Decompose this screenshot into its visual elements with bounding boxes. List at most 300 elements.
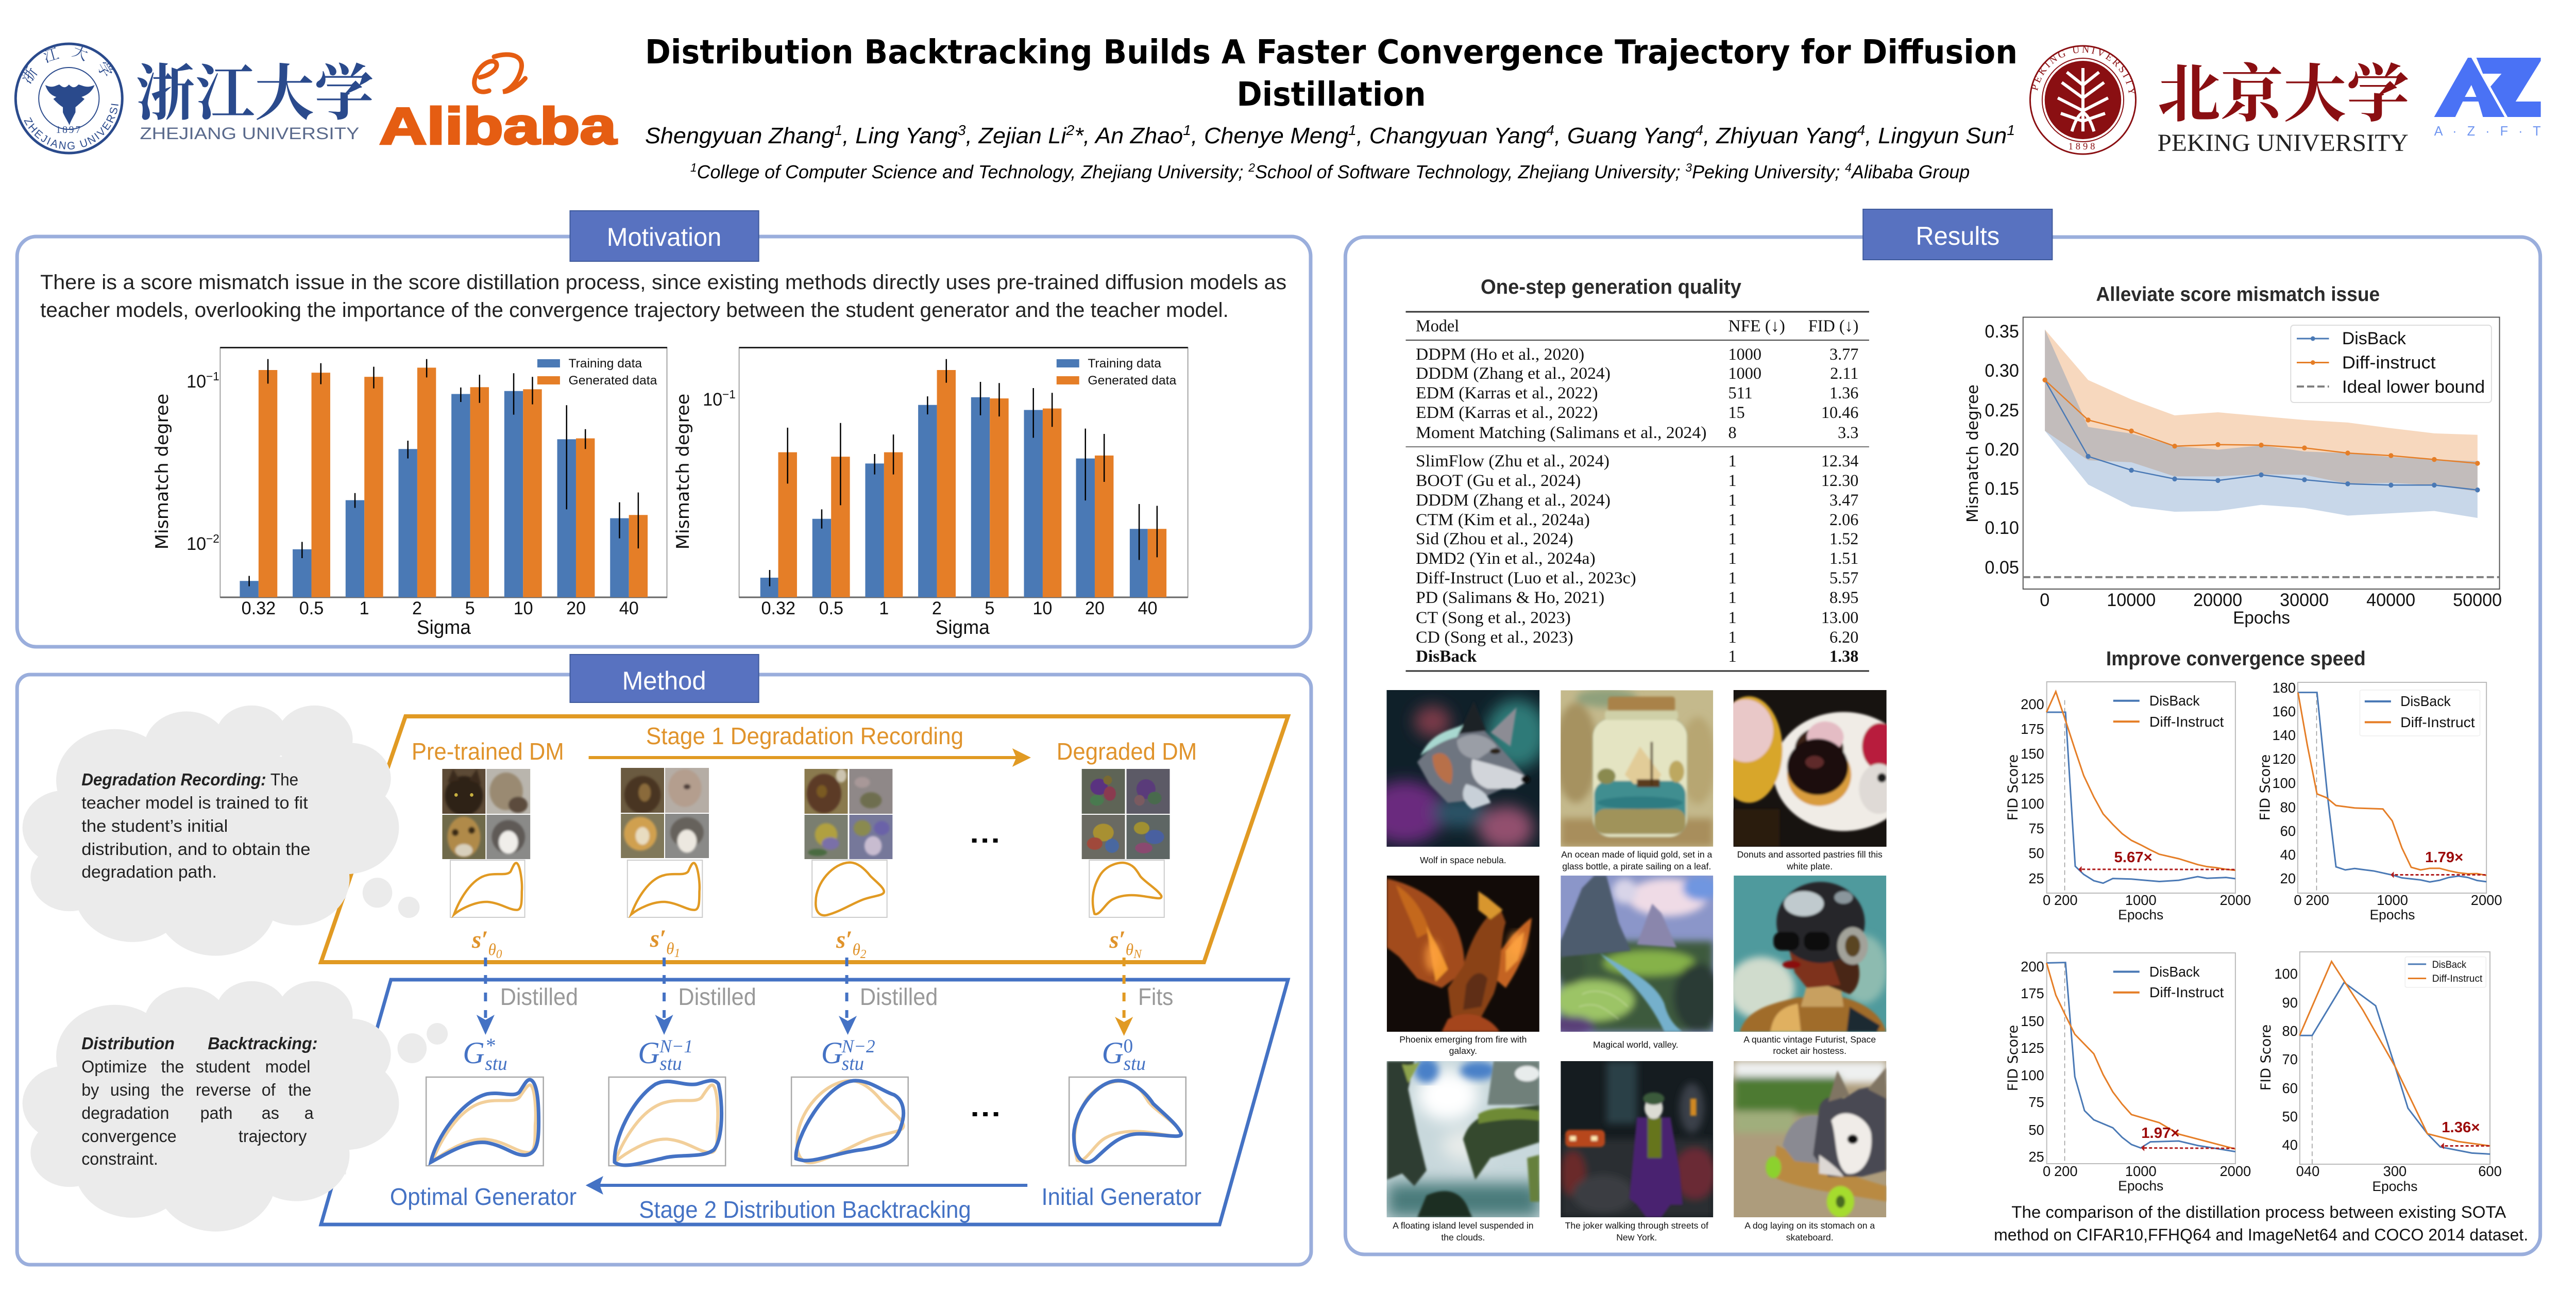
authors: 1 xyxy=(2007,122,2015,138)
y axis ticks: 10 xyxy=(187,372,206,392)
line chart: convergence B: 60 xyxy=(2280,823,2296,839)
line chart: convergence B: 160 xyxy=(2272,703,2296,719)
table rows: PD (Salimans & Ho, 2021) xyxy=(1416,589,1604,607)
table rows: 511 xyxy=(1728,384,1753,402)
line chart: convergence A: 2000 xyxy=(2219,892,2251,908)
table rows: 12.30 xyxy=(1821,472,1858,490)
table rows: Moment Matching (Salimans et al., 2024) xyxy=(1416,424,1707,442)
line chart: convergence A: 200 xyxy=(2021,696,2044,712)
generator labels: stu xyxy=(842,1053,864,1075)
line chart: convergence C: 75 xyxy=(2028,1094,2044,1110)
table rows: 2.06 xyxy=(1829,511,1858,529)
caption: white plate. xyxy=(1786,861,1833,871)
caption: galaxy. xyxy=(1449,1046,1477,1056)
speedup label: 1.36× xyxy=(2442,1119,2480,1136)
line chart: convergence B xyxy=(2258,680,2502,922)
cloud: distribution backtracking xyxy=(23,981,448,1232)
line chart: convergence D: 100 xyxy=(2274,966,2298,982)
x axis ticks: 0.32 xyxy=(242,599,276,618)
table header: FID (↓) xyxy=(1808,317,1858,335)
y axis ticks: 0.25 xyxy=(1985,401,2019,421)
line chart: convergence D: 90 xyxy=(2282,995,2298,1011)
table rows: 15 xyxy=(1728,404,1745,422)
x axis ticks: 0.5 xyxy=(299,599,324,618)
authors: , Changyuan Yang xyxy=(1357,124,1546,148)
curve box: step 2 xyxy=(812,860,887,917)
table rows: 6.20 xyxy=(1829,628,1858,647)
line chart: convergence B: FID Score xyxy=(2258,754,2273,820)
table rows: 1 xyxy=(1728,511,1737,529)
table rows: 1000 xyxy=(1728,345,1761,364)
y axis ticks: 10 xyxy=(187,534,206,554)
Zhejiang University English name: ZHEJIANG UNIVERSITY xyxy=(140,124,359,143)
Peking University Chinese name: 北京大学 xyxy=(2158,44,2410,134)
table rows: CT (Song et al., 2023) xyxy=(1416,609,1571,627)
caption: New York. xyxy=(1616,1232,1657,1243)
table rows: 1 xyxy=(1728,491,1737,510)
affiliations: Peking University; xyxy=(1692,162,1845,182)
caption: A quantic vintage Futurist, Space xyxy=(1743,1034,1876,1045)
results caption: method on CIFAR10,FFHQ64 and ImageNet64 and COCO 2014 dataset. xyxy=(1994,1226,2528,1244)
legend xyxy=(1057,357,1177,388)
image: jar xyxy=(1561,690,1714,847)
score labels: θ xyxy=(666,939,680,960)
line chart: convergence D: 70 xyxy=(2282,1051,2298,1067)
line chart: convergence A: 50 xyxy=(2028,845,2044,861)
x axis ticks: 0 xyxy=(2040,591,2049,610)
table rows: DisBack xyxy=(1416,647,1477,666)
line chart: convergence D xyxy=(2259,952,2502,1194)
image: wolf xyxy=(1386,690,1539,847)
logo: AZFT xyxy=(2434,58,2541,139)
caption: the clouds. xyxy=(1441,1232,1485,1243)
x axis ticks: 40 xyxy=(1138,599,1158,618)
icon: Alibaba swirl xyxy=(474,55,526,92)
y axis ticks: 0.35 xyxy=(1985,322,2019,342)
cloud text: Backtracking: xyxy=(208,1034,317,1053)
image gallery xyxy=(1365,689,1914,1243)
authors: , Zejian Li xyxy=(966,124,1067,148)
affiliations: 1 xyxy=(690,161,697,174)
table rows: 1.38 xyxy=(1829,647,1858,666)
y axis ticks xyxy=(1985,322,2019,578)
arrow labels xyxy=(500,984,1173,1010)
authors: 2 xyxy=(1065,122,1074,138)
caption: Donuts and assorted pastries fill this xyxy=(1737,849,1883,860)
table rows: 3.3 xyxy=(1838,424,1858,442)
ellipsis: stage 2 xyxy=(973,1112,998,1116)
line chart: convergence B: Epochs xyxy=(2370,907,2415,922)
line chart: convergence A: Diff-Instruct xyxy=(2149,714,2224,730)
y axis tick: −1 xyxy=(722,388,736,401)
arrow: distilled 2 xyxy=(655,958,673,1035)
authors: Shengyuan Zhang xyxy=(645,124,826,148)
table rows: 1.51 xyxy=(1829,549,1858,568)
legend: DisBack xyxy=(2342,329,2406,348)
line chart: convergence B: 40 xyxy=(2280,847,2296,863)
line chart: convergence D: FID Score xyxy=(2259,1025,2274,1090)
heading: Motivation: Motivation xyxy=(607,223,721,251)
line chart: convergence B: 0 xyxy=(2294,892,2302,908)
line chart: convergence C: 100 xyxy=(2021,1067,2044,1083)
legend xyxy=(537,357,657,388)
line chart: convergence A: 200 xyxy=(2054,892,2078,908)
score labels: s′ xyxy=(836,927,852,953)
x axis ticks: 10 xyxy=(1032,599,1052,618)
table rows: 8 xyxy=(1728,424,1737,442)
caption: Phoenix emerging from fire with xyxy=(1399,1034,1527,1045)
line chart: convergence C: Diff-Instruct xyxy=(2149,984,2224,1000)
icon: AZ mark xyxy=(2434,58,2541,117)
cloud text xyxy=(81,1034,317,1168)
cloud text: the xyxy=(161,1080,184,1099)
caption xyxy=(1561,849,1712,871)
caption: rocket air hostess. xyxy=(1773,1046,1846,1056)
line: Diff-instruct xyxy=(2042,378,2480,466)
image: joker xyxy=(1561,1061,1716,1217)
table rows: SlimFlow (Zhu et al., 2024) xyxy=(1416,452,1609,471)
line chart: convergence B: 80 xyxy=(2280,799,2296,815)
line chart: convergence A: 75 xyxy=(2028,820,2044,836)
image grid: degrading samples 2 xyxy=(805,769,892,859)
arrow: stage 2 xyxy=(586,1176,1027,1195)
curve box: degraded xyxy=(1089,860,1164,917)
score labels: s′ xyxy=(650,926,666,952)
x axis ticks: 20 xyxy=(1085,599,1105,618)
table rows: 8.95 xyxy=(1829,589,1858,607)
curve box: generator N-1 xyxy=(609,1077,725,1166)
curve box: step 1 xyxy=(628,860,702,917)
image: futurist xyxy=(1727,876,1888,1032)
line chart: convergence C: 200 xyxy=(2054,1163,2078,1179)
table rows: 1000 xyxy=(1728,364,1761,383)
legend: Generated data xyxy=(569,374,657,388)
score labels: θ xyxy=(488,941,502,961)
table rows: DDPM (Ho et al., 2020) xyxy=(1416,345,1584,364)
line chart: convergence C: 1000 xyxy=(2125,1163,2157,1179)
legend xyxy=(2291,325,2492,402)
line chart: convergence D: 300 xyxy=(2383,1163,2406,1179)
line chart: convergence A: 125 xyxy=(2021,770,2044,786)
x axis ticks: 40 xyxy=(619,599,639,618)
score labels: s′ xyxy=(1109,927,1126,953)
line chart: convergence B: 200 xyxy=(2306,892,2329,908)
x axis ticks: 2 xyxy=(932,599,942,618)
heading: Method xyxy=(570,655,759,702)
bar chart: mismatch degree left xyxy=(152,347,667,638)
line chart: convergence B: 1000 xyxy=(2377,892,2408,908)
image: valley xyxy=(1552,876,1722,1035)
score labels: N xyxy=(1133,948,1142,961)
y axis ticks: −2 xyxy=(206,532,219,545)
line chart: convergence D: 60 xyxy=(2282,1080,2298,1096)
y axis ticks: 0.10 xyxy=(1985,518,2019,538)
x axis ticks: 20000 xyxy=(2193,591,2242,610)
results caption: The comparison of the distillation process between existing SOTA xyxy=(2011,1203,2506,1221)
x axis ticks: 40000 xyxy=(2366,591,2415,610)
table header: Model xyxy=(1416,317,1459,335)
image: floating island xyxy=(1387,1058,1539,1217)
ellipsis: stage 1 xyxy=(972,838,998,843)
authors: *, An Zhao xyxy=(1074,124,1183,148)
line chart: convergence C: 125 xyxy=(2021,1040,2044,1056)
panel: results xyxy=(1345,209,2540,1254)
icon: Peking University seal: 1898 xyxy=(2069,141,2097,152)
line chart: convergence D: Diff-Instruct xyxy=(2432,973,2483,984)
cloud text: as xyxy=(262,1103,279,1122)
line chart: convergence A: 0 xyxy=(2043,892,2050,908)
legend: Generated data xyxy=(1088,374,1177,388)
authors: , Zhiyuan Yang xyxy=(1703,124,1857,148)
logo: Alibaba xyxy=(379,55,617,155)
motivation text: There is a score mismatch issue in the score distillation process, since existing methods directly uses pre-trained diffusion models as xyxy=(40,271,1286,294)
line chart: convergence C xyxy=(2005,953,2251,1194)
band: Diff-instruct xyxy=(2045,329,2478,492)
table heading: One-step generation quality xyxy=(1481,276,1741,298)
heading: Results xyxy=(1863,209,2052,260)
line chart: convergence A: 175 xyxy=(2021,721,2044,737)
icon: Zhejiang University seal: 1897 xyxy=(56,124,82,136)
axis title: Mismatch degree: Mismatch degree xyxy=(673,394,693,549)
x axis ticks: 5 xyxy=(465,599,475,618)
table rows: EDM (Karras et al., 2022) xyxy=(1416,404,1598,422)
table rows: 1 xyxy=(1728,452,1737,471)
speedup label: 1.79× xyxy=(2425,849,2463,866)
cloud text: the xyxy=(161,1057,184,1076)
y axis ticks: 0.30 xyxy=(1985,361,2019,381)
line chart: mismatch over epochs xyxy=(1964,317,2502,628)
axis title: Mismatch degree: Mismatch degree xyxy=(1964,384,1982,523)
heading: Alleviate score mismatch issue: Alleviate score mismatch issue xyxy=(2096,283,2380,306)
generator labels: stu xyxy=(485,1053,507,1075)
curve box: initial generator xyxy=(1069,1077,1186,1166)
table rows: Diff-Instruct (Luo et al., 2023c) xyxy=(1416,569,1636,588)
authors: 4 xyxy=(1857,122,1865,138)
speedup label: 5.67× xyxy=(2114,849,2153,866)
image grid: pre-trained samples xyxy=(442,769,530,859)
table rows: DDDM (Zhang et al., 2024) xyxy=(1416,364,1611,383)
generator labels: stu xyxy=(659,1053,682,1075)
line chart: convergence A: DisBack xyxy=(2149,693,2200,709)
heading: Results: Results xyxy=(1916,222,1999,250)
logo: Peking University xyxy=(2029,44,2410,157)
authors: 4 xyxy=(1695,122,1703,138)
score labels xyxy=(471,926,1142,961)
table rows: 1 xyxy=(1728,589,1737,607)
score labels: θ xyxy=(1126,941,1142,961)
x axis ticks: 50000 xyxy=(2453,591,2502,610)
line chart: convergence C: 25 xyxy=(2028,1149,2044,1165)
cloud text: path xyxy=(200,1103,232,1122)
table rows xyxy=(1416,345,1858,666)
axis title: Sigma: Sigma xyxy=(936,616,990,638)
table rows: Sid (Zhou et al., 2024) xyxy=(1416,530,1573,548)
generator labels: N−2 xyxy=(841,1036,875,1056)
line chart: convergence C: DisBack xyxy=(2149,964,2200,980)
generator labels: * xyxy=(485,1034,495,1057)
table rows: 1 xyxy=(1728,647,1737,666)
Zhejiang University Chinese name: 浙江大学 xyxy=(136,45,374,132)
generator labels: N−1 xyxy=(659,1036,693,1056)
affiliations: College of Computer Science and Technology, Zhejiang University; xyxy=(697,162,1248,182)
motivation text: teacher models, overlooking the importance of the convergence trajectory between the student generator and the teacher model. xyxy=(40,299,1229,322)
line: DisBack xyxy=(2045,380,2480,493)
table rows: 1 xyxy=(1728,549,1737,568)
legend: Ideal lower bound xyxy=(2342,378,2485,397)
cloud text: a xyxy=(304,1103,314,1122)
title: Distribution Backtracking Builds A Faster Convergence Trajectory for Diffusion xyxy=(645,32,2018,71)
authors: , Guang Yang xyxy=(1554,124,1695,148)
line chart: convergence D: 040 xyxy=(2296,1163,2319,1179)
image: dog on skateboard xyxy=(1734,1061,1886,1217)
line chart: convergence A: 25 xyxy=(2028,870,2044,886)
cloud text: by xyxy=(81,1080,99,1099)
cloud text: model xyxy=(265,1057,310,1076)
image grid: degraded samples xyxy=(1082,769,1170,859)
generator labels: stu xyxy=(1124,1053,1146,1075)
stage 1 labels: Degraded DM xyxy=(1057,739,1197,765)
title: Distillation xyxy=(1236,75,1426,113)
x axis ticks: 1 xyxy=(879,599,889,618)
legend: Diff-instruct xyxy=(2342,354,2436,373)
arrow labels: Distilled xyxy=(500,984,578,1010)
generator labels: G xyxy=(1102,1035,1124,1070)
table rows: 1 xyxy=(1728,472,1737,490)
title xyxy=(645,32,2018,113)
x axis ticks: 2 xyxy=(412,599,422,618)
caption: Magical world, valley. xyxy=(1593,1039,1679,1050)
cloud text: Degradation Recording: The xyxy=(81,770,298,789)
line chart: convergence A: 100 xyxy=(2021,796,2044,812)
line chart: convergence B: 120 xyxy=(2272,751,2296,767)
distribution boxes: stage 1 curves xyxy=(450,860,1164,917)
line chart: convergence D: 600 xyxy=(2478,1163,2502,1179)
Alibaba wordmark: Alibaba xyxy=(379,97,617,155)
heading: Method: Method xyxy=(622,666,706,695)
logo: Zhejiang University xyxy=(14,42,374,155)
line chart: convergence B: 180 xyxy=(2272,680,2296,696)
caption xyxy=(1743,1034,1876,1056)
results caption xyxy=(1994,1203,2528,1244)
legend: Training data xyxy=(1088,357,1162,371)
authors: 4 xyxy=(1546,122,1554,138)
line chart: convergence D: DisBack xyxy=(2432,959,2467,970)
y axis ticks: −1 xyxy=(206,370,219,383)
generator labels: 0 xyxy=(1124,1036,1133,1057)
y axis ticks: 0.15 xyxy=(1985,479,2019,499)
x axis ticks xyxy=(761,599,1158,618)
table rows: 1 xyxy=(1728,628,1737,647)
line chart: convergence B: 2000 xyxy=(2471,892,2502,908)
line chart: convergence B: 20 xyxy=(2280,870,2296,886)
line chart: convergence C: 50 xyxy=(2028,1122,2044,1138)
image grid: degrading samples 1 xyxy=(621,768,709,858)
axis title: Sigma: Sigma xyxy=(417,616,471,638)
generator labels: G xyxy=(463,1035,485,1070)
cloud text: of xyxy=(262,1080,276,1099)
line chart: convergence C: Epochs xyxy=(2118,1178,2163,1194)
caption: An ocean made of liquid gold, set in a xyxy=(1561,849,1712,860)
cloud text: convergence xyxy=(81,1127,177,1146)
line chart: convergence D: 80 xyxy=(2282,1023,2298,1039)
table rows: 13.00 xyxy=(1821,609,1858,627)
line chart: convergence A: FID Score xyxy=(2005,754,2021,820)
Peking University English name: PEKING UNIVERSITY xyxy=(2158,130,2409,157)
caption xyxy=(1744,1220,1875,1243)
line chart: convergence C: 2000 xyxy=(2219,1163,2251,1179)
curve box: generator N-2 xyxy=(791,1077,908,1166)
line chart: convergence B: 100 xyxy=(2272,775,2296,791)
line chart: convergence C: 175 xyxy=(2021,985,2044,1001)
cloud text: reverse xyxy=(196,1080,251,1099)
table rows: 1.52 xyxy=(1829,530,1858,548)
table rows: 5.57 xyxy=(1829,569,1858,588)
ideal lower bound xyxy=(2023,576,2499,578)
cloud text: degradation path. xyxy=(81,862,217,881)
band: DisBack xyxy=(2045,329,2478,518)
curve box: pre-trained xyxy=(450,860,525,917)
table rows: 3.47 xyxy=(1829,491,1858,510)
cloud text: trajectory xyxy=(239,1127,307,1146)
cloud text: Optimize xyxy=(81,1057,147,1076)
y axis ticks: 0.05 xyxy=(1985,558,2019,578)
caption xyxy=(1737,849,1883,871)
line chart: convergence A xyxy=(2005,682,2251,922)
panel: motivation xyxy=(17,211,1311,647)
caption: skateboard. xyxy=(1786,1232,1834,1243)
table rows: DDDM (Zhang et al., 2024) xyxy=(1416,491,1611,510)
stage 1 labels: Pre-trained DM xyxy=(412,739,564,765)
line chart: convergence A: 150 xyxy=(2021,746,2044,762)
authors: 1 xyxy=(1183,122,1191,138)
stage 1 labels xyxy=(412,723,1197,765)
cloud: degradation recording xyxy=(23,706,420,956)
line chart: convergence C: 150 xyxy=(2021,1013,2044,1029)
table rows: CD (Song et al., 2023) xyxy=(1416,628,1573,647)
caption: A dog laying on its stomach on a xyxy=(1744,1220,1875,1231)
heading: Motivation xyxy=(570,211,759,261)
icon: Peking University seal: PEKING UNIVERSITY xyxy=(2032,46,2135,93)
x axis ticks: 20 xyxy=(566,599,586,618)
x axis ticks: 5 xyxy=(985,599,994,618)
caption xyxy=(1399,1034,1527,1056)
authors: 1 xyxy=(1348,122,1357,138)
arrow: stage 1 xyxy=(589,748,1031,767)
x axis ticks xyxy=(242,599,639,618)
x axis ticks: 10000 xyxy=(2107,591,2156,610)
line chart: convergence B: Diff-Instruct xyxy=(2400,714,2475,730)
speedup label: 1.97× xyxy=(2141,1125,2179,1142)
legend: Training data xyxy=(569,357,642,371)
table rows: 1 xyxy=(1728,569,1737,588)
cloud text: degradation xyxy=(81,1103,169,1122)
caption xyxy=(1393,1220,1534,1243)
arrow labels: Distilled xyxy=(860,984,938,1010)
table rows: BOOT (Gu et al., 2024) xyxy=(1416,472,1581,490)
bar chart: mismatch degree right xyxy=(673,347,1188,638)
stage 2 labels: Optimal Generator xyxy=(390,1184,577,1210)
heading: Improve convergence speed: Improve convergence speed xyxy=(2106,648,2366,670)
cloud text: constraint. xyxy=(81,1149,158,1168)
score labels: θ xyxy=(852,941,867,961)
table rows: EDM (Karras et al., 2022) xyxy=(1416,384,1598,402)
distribution boxes: stage 2 curves xyxy=(426,1077,1186,1166)
image: phoenix xyxy=(1387,876,1539,1032)
stage 2 labels: Initial Generator xyxy=(1041,1184,1201,1210)
line chart: convergence A: 1000 xyxy=(2125,892,2157,908)
line chart: convergence B: DisBack xyxy=(2400,693,2451,709)
authors: , Ling Yang xyxy=(842,124,958,148)
